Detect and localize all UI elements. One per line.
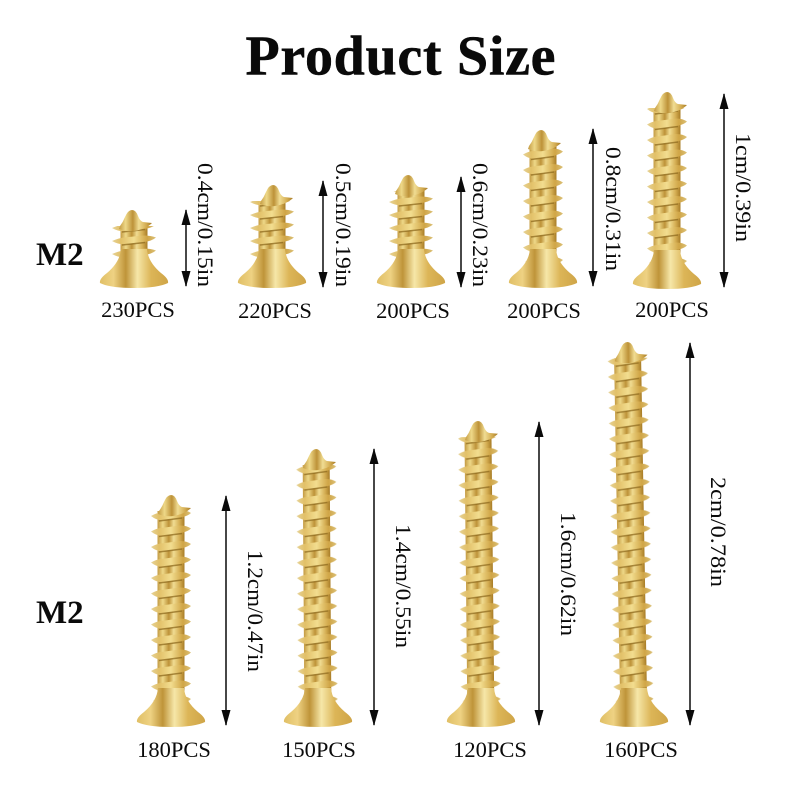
arrow 0.4cm [185, 210, 187, 286]
quantity 230PCS: 230PCS [101, 297, 175, 322]
arrow 0.5cm [322, 181, 324, 287]
row label: M2 top: M2 [36, 237, 84, 273]
arrow 1.2cm [225, 496, 227, 725]
dimension label 1.4cm: 1.4cm/0.55in [391, 524, 416, 648]
dimension label 1.2cm: 1.2cm/0.47in [243, 550, 268, 672]
dimension label 2cm: 2cm/0.78in [706, 477, 731, 587]
screw 1.6cm [447, 421, 515, 727]
dimension label 1.6cm: 1.6cm/0.62in [556, 512, 581, 636]
dimension label 0.8cm: 0.8cm/0.31in [601, 147, 626, 271]
arrow 0.8cm [592, 129, 594, 286]
quantity 200PCS 0.6cm: 200PCS [376, 298, 450, 323]
dimension label 0.6cm: 0.6cm/0.23in [468, 163, 493, 287]
quantity 200PCS 0.8cm: 200PCS [507, 298, 581, 323]
screw 1.4cm [284, 449, 352, 727]
screw 1cm [633, 92, 701, 289]
row label: M2 bottom: M2 [36, 595, 84, 631]
screw 1.2cm [137, 495, 205, 727]
screw 0.5cm [238, 185, 306, 288]
dimension label 1cm: 1cm/0.39in [731, 133, 756, 242]
screw 0.4cm [100, 210, 168, 288]
screw 2cm [600, 342, 668, 727]
arrow 1.6cm [538, 422, 540, 725]
arrow 1.4cm [373, 449, 375, 725]
quantity 180PCS: 180PCS [137, 737, 211, 762]
screw 0.8cm [509, 130, 577, 288]
screw 0.6cm [377, 175, 445, 288]
arrow 1cm [723, 94, 725, 287]
quantity 220PCS: 220PCS [238, 298, 312, 323]
dimension label 0.5cm: 0.5cm/0.19in [331, 163, 356, 287]
arrow 0.6cm [460, 177, 462, 287]
quantity 200PCS 1cm: 200PCS [635, 297, 709, 322]
arrow 2cm [689, 343, 691, 725]
quantity 120PCS: 120PCS [453, 737, 527, 762]
quantity 150PCS: 150PCS [282, 737, 356, 762]
title: Product Size [246, 26, 556, 88]
quantity 160PCS: 160PCS [604, 737, 678, 762]
dimension label 0.4cm: 0.4cm/0.15in [193, 163, 218, 287]
